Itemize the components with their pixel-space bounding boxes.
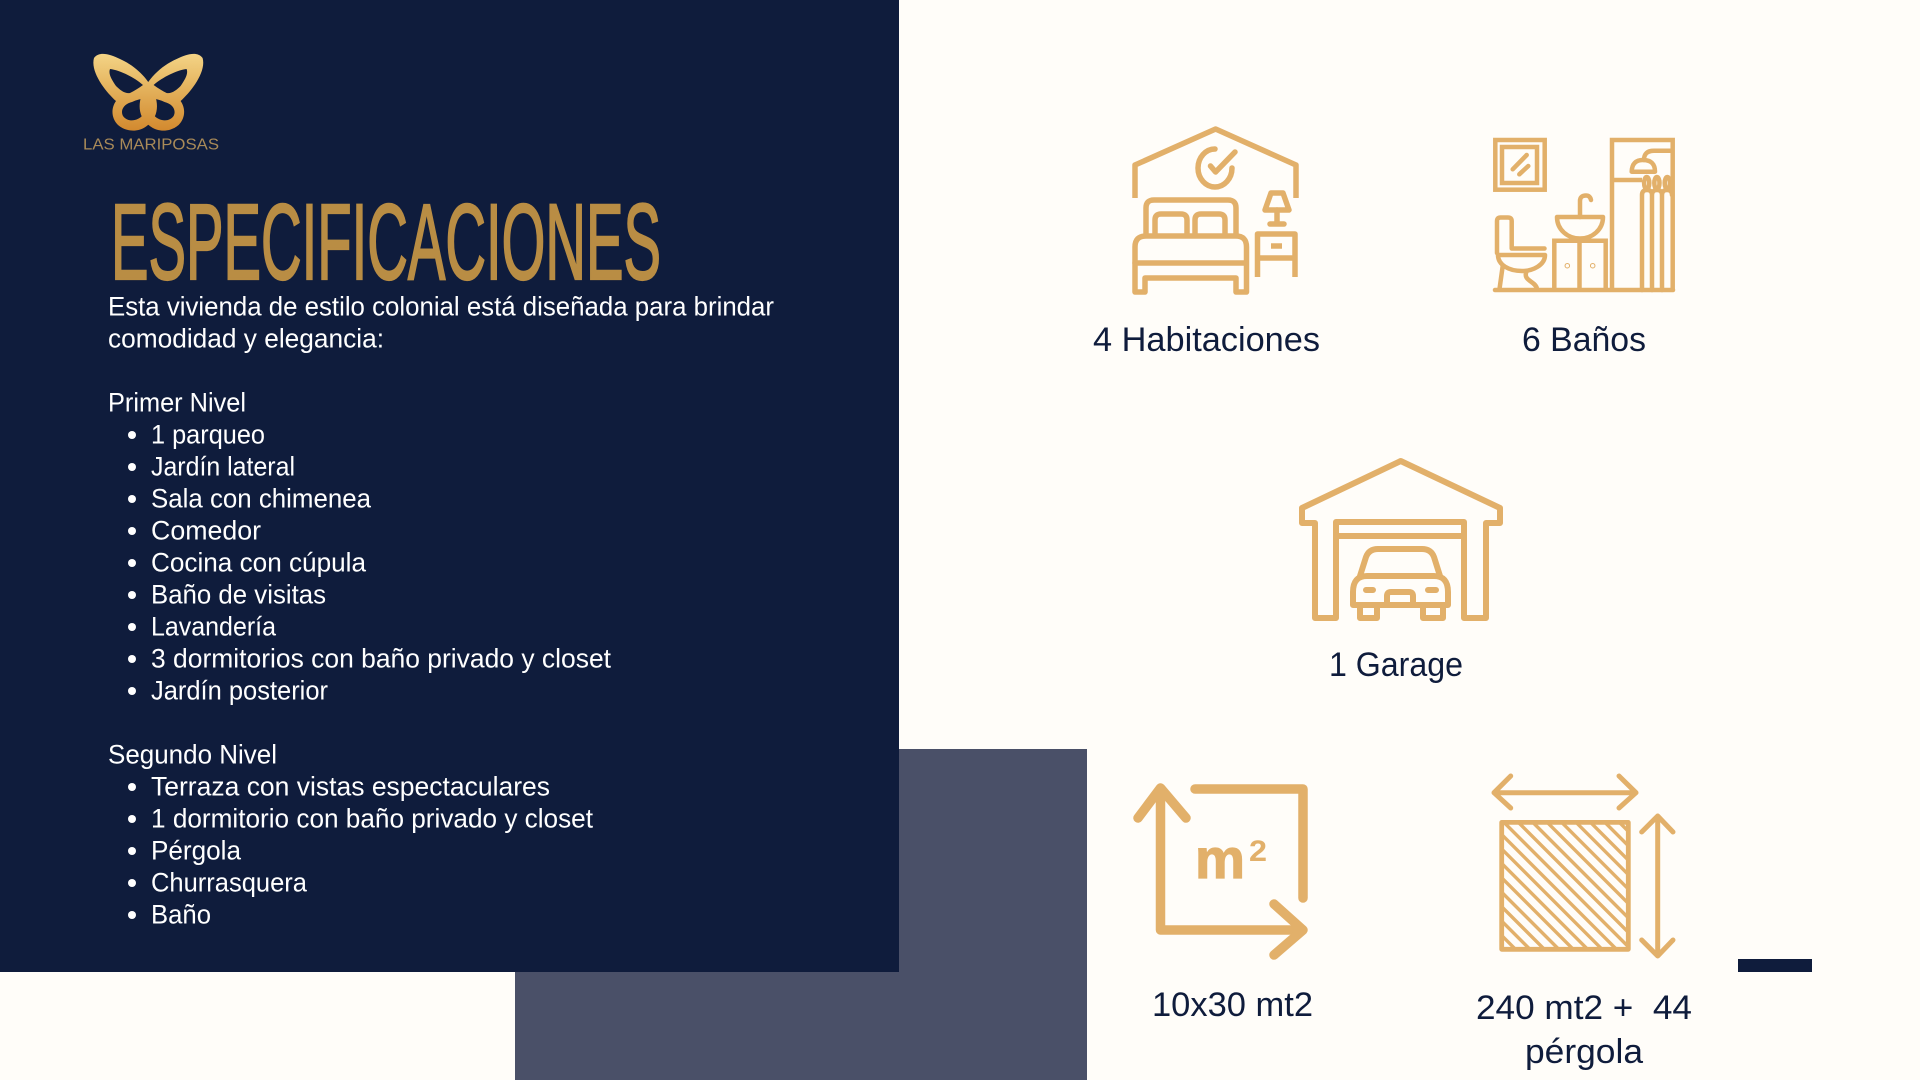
text block: primer nivel: Jardín posterior	[151, 676, 328, 706]
label: 6 baños: 6 Baños	[1522, 321, 1646, 359]
label: 240 mt2 + 44 pérgola: pérgola	[1525, 1033, 1643, 1071]
text block: primer nivel	[108, 388, 611, 706]
text block: introduction: Esta vivienda de estilo colonial está diseñada para brindar	[108, 292, 774, 322]
slate background block	[515, 749, 1087, 1080]
text block: introduction: comodidad y elegancia:	[108, 324, 384, 354]
logo: Las Mariposas	[83, 54, 219, 154]
icon: square metres: m	[1195, 827, 1245, 890]
spec: construcción	[1476, 776, 1692, 1071]
label: 10x30 mt2: 10x30 mt2	[1152, 986, 1313, 1024]
label: 4 habitaciones: 4 Habitaciones	[1093, 321, 1320, 359]
icon: hatched plot with dimension arrows	[1494, 776, 1673, 956]
spec: baños	[1495, 140, 1673, 359]
text block: segundo nivel: 1 dormitorio con baño privado y closet	[151, 804, 593, 834]
text block: segundo nivel: Segundo Nivel	[108, 740, 277, 770]
panel: navy specifications	[0, 0, 899, 972]
spec: habitaciones	[1093, 129, 1320, 359]
text block: segundo nivel: Pérgola	[151, 836, 242, 866]
icon: square metres: 2	[1249, 835, 1267, 868]
icon: bathroom	[1495, 140, 1673, 290]
text block: segundo nivel: Churrasquera	[151, 868, 308, 898]
spec: garage	[1302, 461, 1500, 684]
icon: bedroom	[1135, 129, 1296, 292]
text block: primer nivel: 1 parqueo	[151, 420, 265, 450]
text block: introduction	[108, 292, 774, 354]
text block: primer nivel: Cocina con cúpula	[151, 548, 367, 578]
text block: segundo nivel: Baño	[151, 900, 211, 930]
text block: primer nivel: Jardín lateral	[151, 452, 295, 482]
text block: primer nivel: Baño de visitas	[151, 580, 326, 610]
icon: garage with car	[1302, 461, 1500, 618]
text block: primer nivel: Comedor	[151, 516, 261, 546]
spec: lote	[1138, 788, 1313, 1024]
text block: primer nivel: Primer Nivel	[108, 388, 246, 418]
text block: primer nivel: Lavandería	[151, 612, 277, 642]
title: ESPECIFICACIONES	[111, 181, 661, 302]
label: 240 mt2 + 44 pérgola	[1476, 989, 1692, 1071]
logo wordmark: LAS MARIPOSAS	[83, 136, 219, 154]
text block: segundo nivel	[108, 740, 593, 930]
icon: gold butterfly	[93, 54, 203, 131]
small navy dash	[1738, 959, 1812, 972]
label: 1 garage: 1 Garage	[1329, 646, 1463, 684]
text block: primer nivel: Sala con chimenea	[151, 484, 372, 514]
label: 240 mt2 + 44 pérgola: 240 mt2 + 44	[1476, 989, 1692, 1027]
text block: segundo nivel: Terraza con vistas espectaculares	[151, 772, 550, 802]
icon: square metres	[1138, 788, 1303, 955]
text block: primer nivel: 3 dormitorios con baño privado y closet	[151, 644, 611, 674]
